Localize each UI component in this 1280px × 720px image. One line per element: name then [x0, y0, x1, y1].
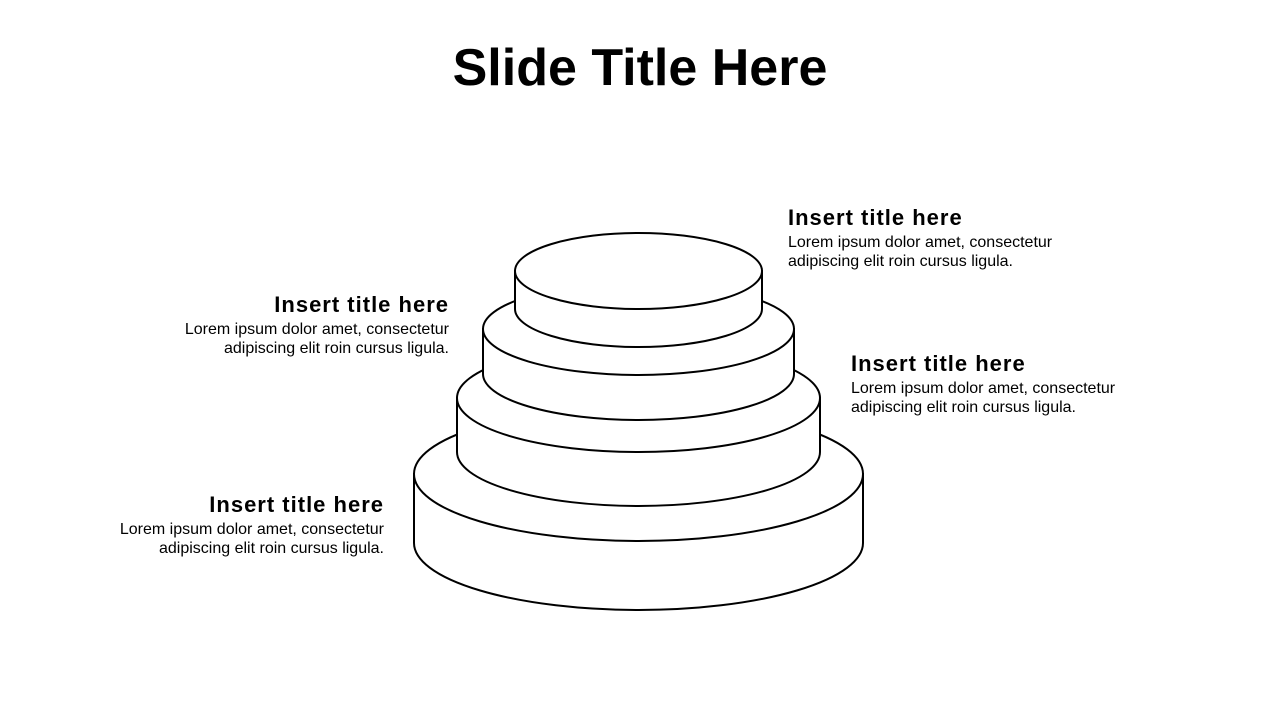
text block: upper left: Insert title here — [274, 292, 449, 317]
text block: top right: adipiscing elit roin cursus ligula. — [788, 253, 1013, 270]
text block: middle right — [851, 351, 1115, 416]
text block: middle right: Lorem ipsum dolor amet, consectetur — [851, 380, 1115, 397]
text block: upper left — [185, 292, 449, 357]
tier 4 top — [515, 233, 762, 347]
tier 3 — [483, 283, 794, 420]
text block: top right: Insert title here — [788, 205, 963, 230]
title: Slide Title Here — [453, 39, 827, 97]
text block: lower left: Lorem ipsum dolor amet, consectetur — [120, 521, 384, 538]
text block: top right — [788, 205, 1052, 270]
text block: lower left: adipiscing elit roin cursus ligula. — [159, 540, 384, 557]
tier 1 bottom — [414, 407, 863, 610]
text block: middle right: adipiscing elit roin cursus ligula. — [851, 399, 1076, 416]
text block: upper left: adipiscing elit roin cursus ligula. — [224, 340, 449, 357]
text block: lower left — [120, 492, 384, 557]
text block: middle right: Insert title here — [851, 351, 1026, 376]
text block: top right: Lorem ipsum dolor amet, consectetur — [788, 234, 1052, 251]
text block: lower left: Insert title here — [209, 492, 384, 517]
text block: upper left: Lorem ipsum dolor amet, consectetur — [185, 321, 449, 338]
tier 2 — [457, 344, 820, 506]
